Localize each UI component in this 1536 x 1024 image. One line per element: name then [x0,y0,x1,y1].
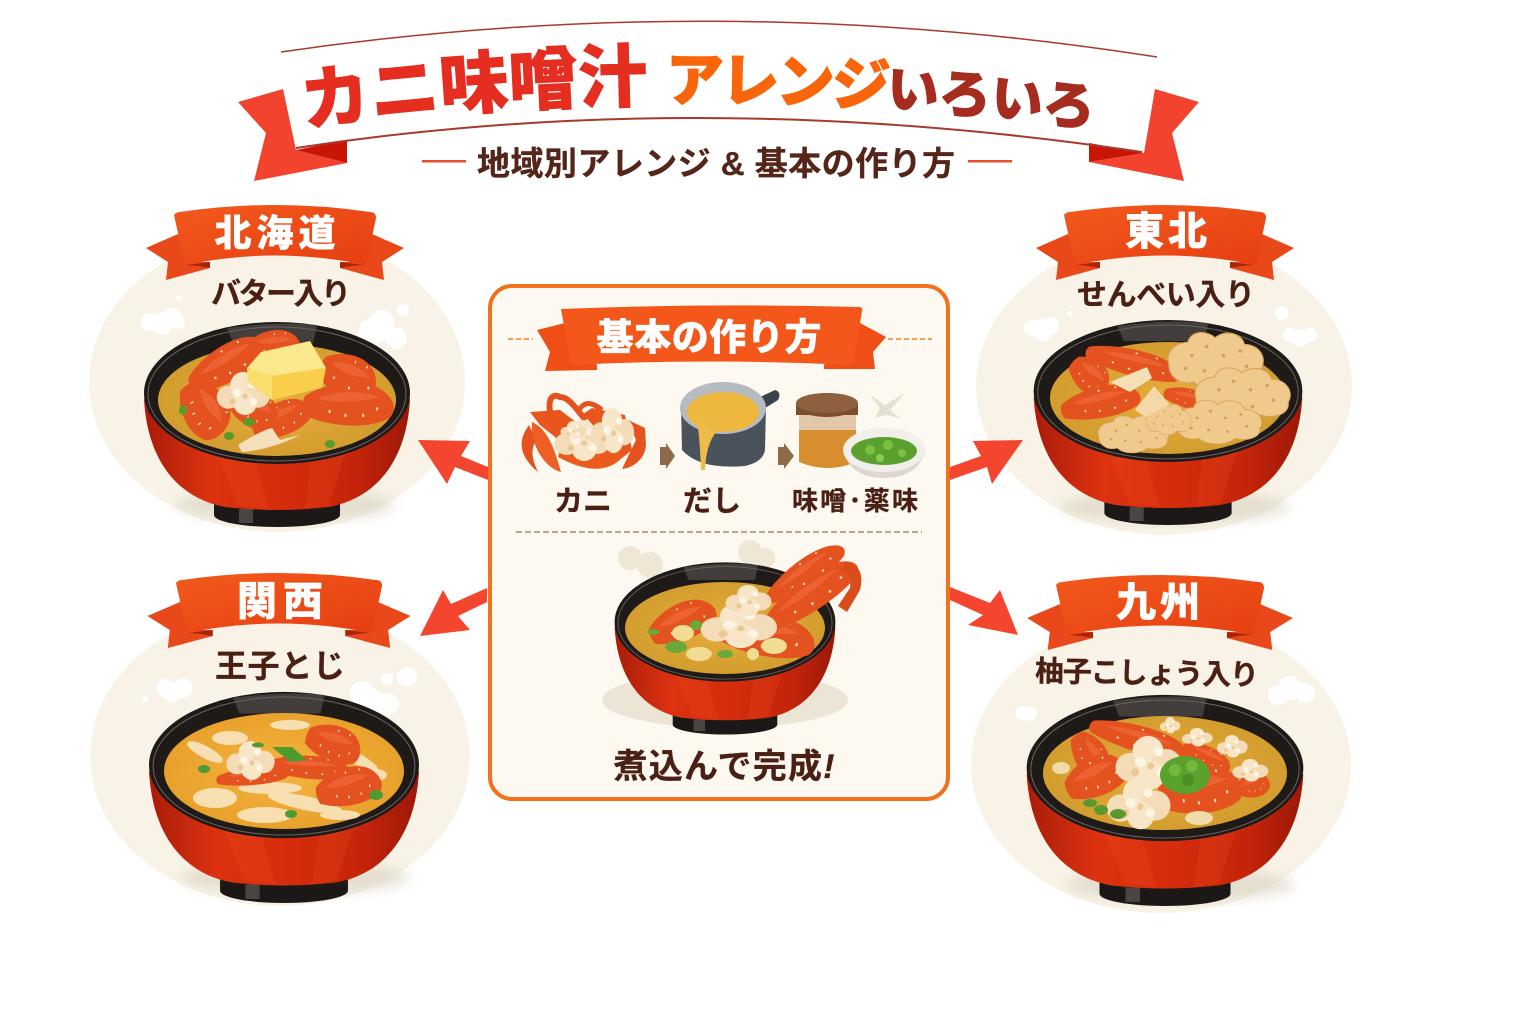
ribbon shape [146,205,404,280]
ribbon: Kyushu [1027,575,1293,650]
panel: Tohoku [976,237,1352,535]
arrow: to Hokkaido [418,440,488,484]
steam [618,540,775,578]
banner left tail [238,89,347,181]
backdrop circle [90,606,470,906]
panel: Kyushu [971,617,1351,913]
peas [179,405,335,448]
icon: miso jar [796,393,858,468]
step label: crab: カニ [554,486,612,518]
subtitle left dash [422,160,466,162]
completion caption: 煮込んで完成! [614,748,834,786]
shadow [175,489,395,521]
bowl [1034,320,1302,525]
arrow: to Kyushu [950,587,1018,635]
arrow: to Tohoku [950,440,1023,484]
region name: 関西 [237,580,323,624]
banner top line [281,21,1157,57]
title text: カニ味噌汁 アレンジいろいろ [306,42,1089,128]
backdrop circle [89,232,465,532]
egg soup [164,713,404,829]
panel frame [490,286,948,799]
arrow: step 1 [660,443,675,469]
label: senbei: せんべい入り [1077,279,1255,312]
finished bowl [602,536,865,735]
steam clouds [1015,676,1315,721]
banner right tail [1089,89,1199,181]
region name: 九州 [1116,581,1200,625]
crab pieces [170,326,394,452]
shadow [1060,491,1290,523]
crab and beans [643,536,865,663]
banner bottom line [296,118,1142,152]
icon: faded herbs [870,393,905,418]
bowl [615,562,835,735]
ribbon shape [1036,205,1294,280]
subtitle text: 地域別アレンジ & 基本の作り方 [477,145,955,182]
heading band [561,305,862,365]
crab meat [1107,717,1268,829]
shadow [180,862,410,894]
ribbon shape [1027,575,1293,650]
ribbon shape [147,573,411,648]
shadow [1065,869,1295,901]
bowl [1027,695,1303,906]
steam clouds [142,667,417,715]
banner left fold [296,140,347,163]
heading text: 基本の作り方 [596,317,822,358]
butter [247,341,326,400]
region name: 東北 [1125,211,1207,254]
divider [516,531,922,533]
heading dashes [508,338,932,340]
steam clouds [141,295,409,349]
bowl [149,692,419,903]
senbei crackers [1098,333,1290,453]
bowl [144,322,410,527]
panel: Kansai [90,606,470,906]
arrow: step 2 [778,443,794,469]
peas [198,742,383,818]
label: butter: バター入り [211,278,351,311]
soup [1043,716,1287,830]
ribbon: Hokkaido [146,205,404,280]
title banner [238,20,1199,181]
panel: basic recipe [490,286,948,799]
egg and crab [185,717,387,823]
arrow: to Kansai [420,588,487,636]
yuzu kosho [1160,756,1210,794]
steam clouds [1024,306,1317,347]
icon: condiment dish [843,428,926,478]
icon: crab [522,396,646,472]
step label: dashi: だし [683,486,741,518]
table shadow [602,672,848,728]
recipe heading ribbon [537,305,886,371]
soup [1050,342,1286,454]
subtitle right dash [968,160,1012,162]
crab pieces [1058,338,1214,426]
banner right fold [1089,143,1144,162]
heading tails [537,323,886,371]
crab pieces [1058,712,1273,819]
soup [625,582,825,674]
panel: Hokkaido [89,232,465,532]
peas and beans [1052,762,1213,825]
ribbon: Kansai [147,573,411,648]
soup [158,344,396,456]
label: egg: 王子とじ [215,648,345,684]
backdrop circle [971,617,1351,913]
icon: dashi pot [680,382,779,470]
backdrop circle [976,237,1352,535]
region name: 北海道 [214,213,336,254]
label: yuzu kosho: 柚子こしょう入り [1035,655,1259,692]
step label: miso and condiments: 味噌･薬味 [792,486,918,516]
ribbon: Tohoku [1036,205,1294,280]
